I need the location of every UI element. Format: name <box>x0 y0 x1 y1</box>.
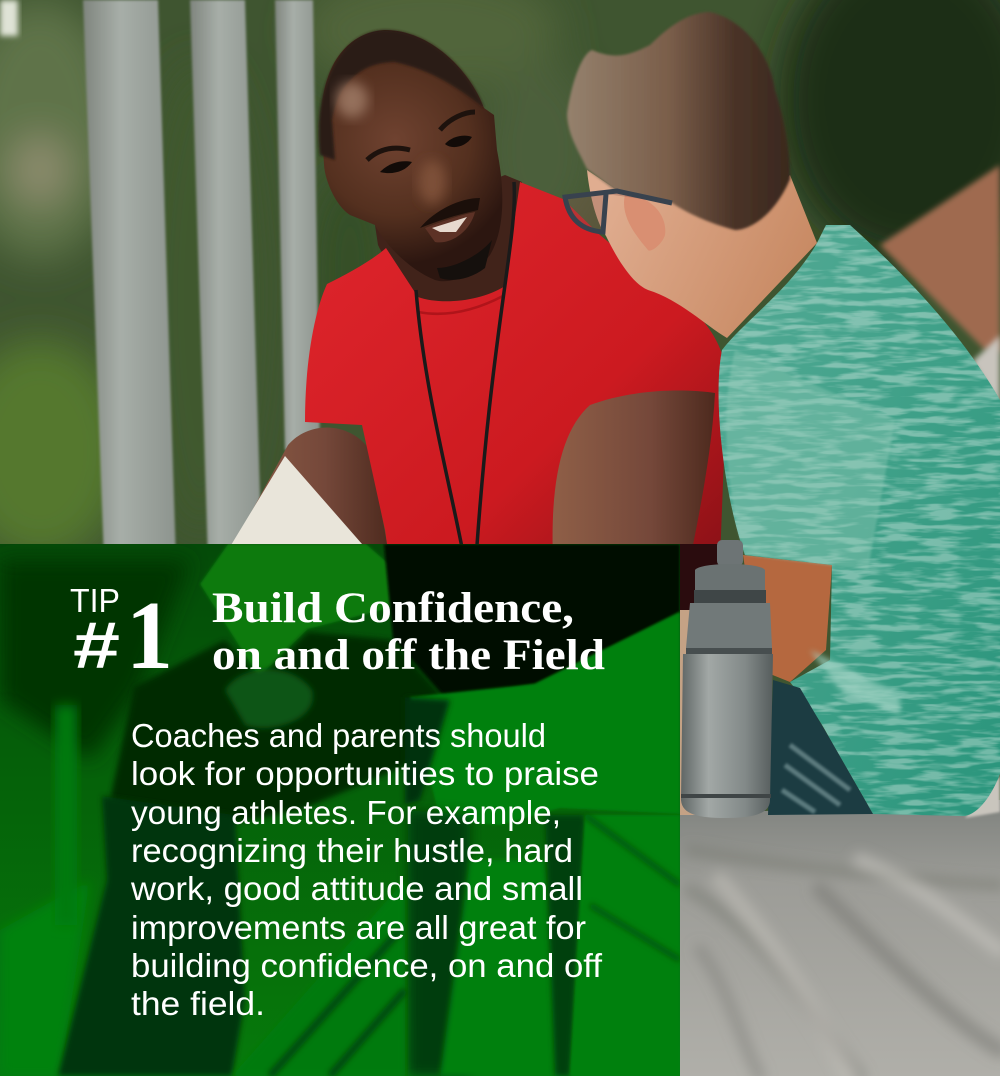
boy: glasses <box>565 191 672 232</box>
tip number badge: 1 <box>126 582 173 690</box>
boy: sleeve <box>726 350 895 570</box>
body text: work, good attitude and small <box>130 870 583 907</box>
boy: neck and face <box>587 170 817 338</box>
lanyard <box>416 182 514 590</box>
man: head <box>322 30 502 281</box>
boy: hair <box>567 12 790 230</box>
body text: building confidence, on and off <box>131 947 603 984</box>
bench gap <box>545 815 585 1076</box>
green overlay panel <box>0 544 680 1076</box>
left foliage bright <box>0 880 90 1076</box>
tip number badge: # <box>73 608 120 682</box>
metal poles <box>83 0 320 560</box>
boy: shorts <box>768 680 873 815</box>
bench streaks <box>317 882 407 1072</box>
body text <box>130 717 603 1022</box>
left leg dark <box>58 796 245 1076</box>
clipboard silhouette <box>200 544 391 672</box>
knee bright highlight <box>410 612 680 825</box>
tip number badge: TIP <box>70 582 120 619</box>
heading <box>212 585 605 679</box>
body text: look for opportunities to praise <box>131 755 599 792</box>
body text: the field. <box>131 985 265 1022</box>
bench bright <box>570 815 680 1076</box>
water bottle <box>680 540 773 818</box>
boy: ear <box>624 195 665 251</box>
man: facial features <box>336 82 492 280</box>
clipboard <box>222 456 362 560</box>
man: neck <box>375 175 522 302</box>
tip number badge <box>70 582 173 690</box>
bench <box>680 775 1000 1076</box>
boy: shirt light patch <box>810 650 900 715</box>
body text: improvements are all great for <box>131 909 586 946</box>
coach shirt dark silhouette <box>384 544 680 700</box>
boy: arm <box>743 555 832 682</box>
body text: young athletes. For example, <box>131 794 561 831</box>
hands <box>225 669 313 728</box>
shin bright <box>440 860 562 1076</box>
foliage dark area <box>0 560 190 760</box>
man: right arm <box>553 391 715 560</box>
forearm shadows <box>110 632 446 830</box>
man: left arm <box>225 428 390 560</box>
man: red shirt <box>305 182 727 600</box>
man: close-cropped hair <box>319 30 484 160</box>
man: collar shading <box>418 296 503 314</box>
roof at right <box>880 165 1000 352</box>
body text: recognizing their hustle, hard <box>131 832 573 869</box>
heading: on and off the Field <box>212 632 605 679</box>
heading: Build Confidence, <box>212 585 574 632</box>
body text: Coaches and parents should <box>131 717 546 754</box>
boy: shirt <box>719 225 1000 816</box>
shin dark <box>408 810 470 1076</box>
knee shadow <box>405 697 450 805</box>
